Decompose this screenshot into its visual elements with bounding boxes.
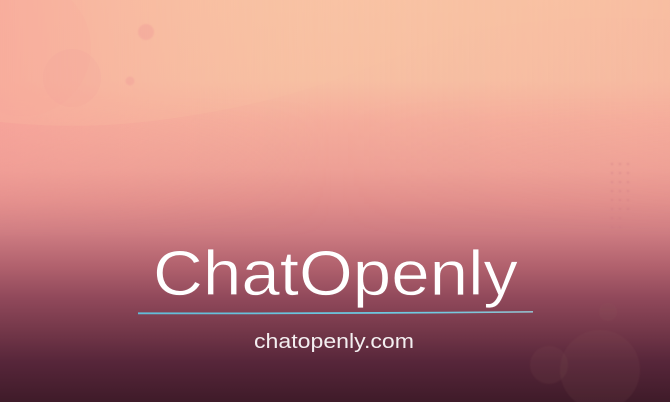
faint circles bottom right	[530, 303, 640, 402]
title: ChatOpenly	[153, 239, 519, 309]
top light wave shape	[0, 0, 670, 126]
dot grid right	[611, 163, 629, 228]
small dot lower	[126, 76, 134, 86]
small dot upper	[138, 24, 154, 40]
medium faint circle top left	[43, 49, 101, 107]
large faint circle top left	[0, 0, 91, 116]
underline	[138, 311, 533, 314]
domain name: chatopenly.com	[254, 331, 414, 353]
horizontal colour tint	[0, 0, 138, 130]
